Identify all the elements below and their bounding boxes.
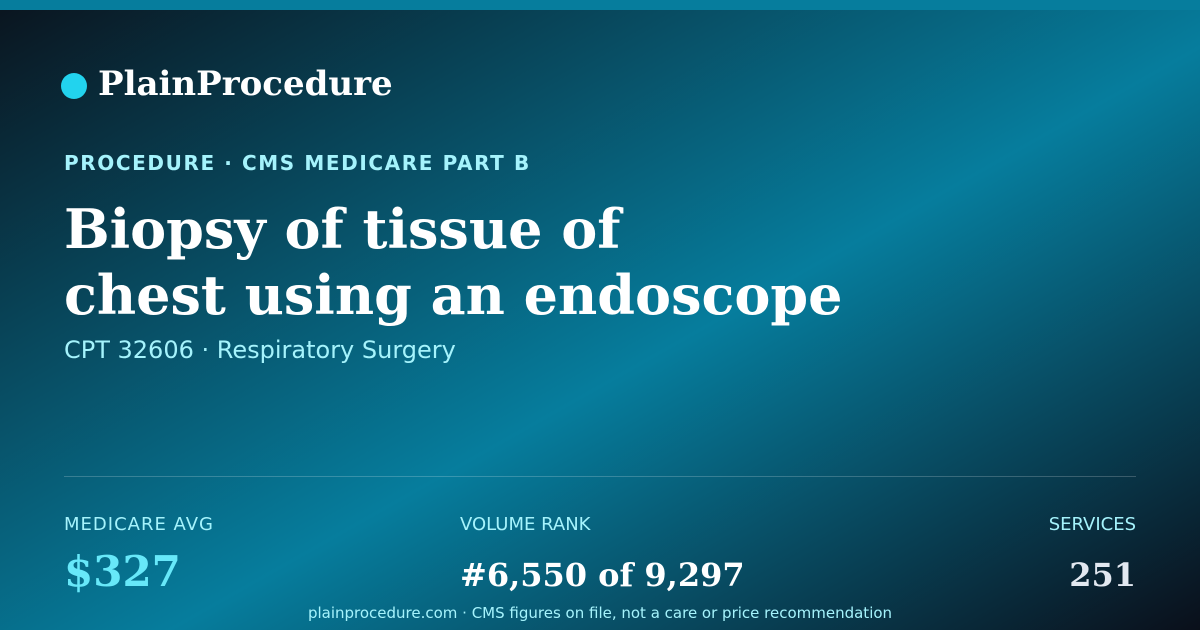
subtitle: CPT 32606 · Respiratory Surgery: [64, 336, 456, 364]
stat label: SERVICES: [1049, 514, 1136, 535]
title: Biopsy of tissue of: [64, 197, 620, 261]
stat: medicare average: [64, 514, 214, 596]
stat label: VOLUME RANK: [460, 514, 590, 535]
footer note: plainprocedure.com · CMS figures on file, not a care or price recommendation: [308, 604, 892, 622]
brand logo: [61, 64, 393, 104]
icon: brand dot: [61, 73, 87, 99]
stat: services: [1049, 514, 1136, 594]
brand name: PlainProcedure: [98, 64, 393, 104]
stat label: MEDICARE AVG: [64, 514, 214, 535]
stat: volume rank: [460, 514, 745, 594]
eyebrow label: PROCEDURE · CMS MEDICARE PART B: [64, 151, 531, 175]
stat value: #6,550 of 9,297: [460, 556, 745, 594]
stat value: $327: [64, 547, 181, 596]
title: chest using an endoscope: [64, 263, 842, 327]
title: [64, 197, 842, 327]
top accent bar: [0, 0, 1200, 10]
stat value: 251: [1069, 556, 1136, 594]
divider: [64, 476, 1136, 477]
